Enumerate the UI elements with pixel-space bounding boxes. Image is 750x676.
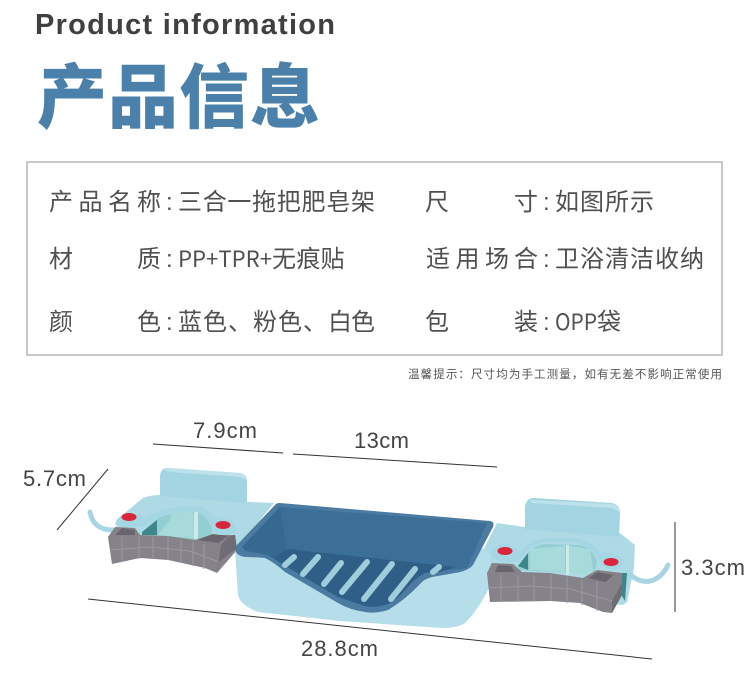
spec: applicable occasions: 适用场合	[426, 246, 538, 273]
dimension: 3.3cm	[675, 522, 745, 612]
spec: applicable occasions: 卫浴清洁收纳	[555, 246, 704, 273]
panel: product specification table	[27, 162, 722, 355]
left clamp unit	[90, 468, 274, 573]
tray drain ribs	[285, 557, 439, 599]
dimension: 3.3cm: 3.3cm	[681, 555, 745, 580]
spec: size: 如图所示	[555, 189, 654, 216]
product illustration: soap and mop holder	[90, 468, 668, 628]
dimension: 28.8cm: 28.8cm	[301, 636, 378, 661]
dimension: 7.9cm: 7.9cm	[193, 418, 257, 443]
dimension: 7.9cm	[153, 418, 283, 453]
spec: packaging: 装	[514, 309, 538, 336]
red buttons	[122, 513, 136, 521]
spec: colour	[49, 309, 375, 336]
spec: colour: 蓝色、粉色、白色	[178, 309, 375, 336]
gray clamp jaw	[108, 527, 237, 573]
right clamp unit	[487, 498, 668, 613]
spec: size: :	[543, 189, 550, 216]
spec: size	[425, 189, 654, 216]
soap tray	[235, 503, 494, 628]
spec: applicable occasions: :	[543, 246, 550, 273]
dimension: 5.7cm	[23, 466, 108, 530]
spec: material: :	[166, 246, 173, 273]
spec: packaging: 袋	[597, 309, 621, 336]
spec: material: 无痕贴	[272, 246, 344, 273]
dimension: 28.8cm	[88, 599, 652, 661]
spec: applicable occasions	[426, 246, 704, 273]
spec: size: 尺	[425, 189, 449, 216]
dimension: 13cm	[293, 428, 497, 467]
spec: product name	[49, 189, 375, 216]
dimension: 5.7cm: 5.7cm	[23, 466, 86, 491]
spec: packaging	[425, 305, 621, 337]
spec: packaging: OPP	[555, 305, 597, 337]
spec: colour: :	[166, 309, 173, 336]
red buttons	[498, 547, 512, 555]
spec: packaging: :	[543, 309, 550, 336]
spec: material: 质	[137, 246, 161, 273]
note: measurement disclaimer: 温馨提示：尺寸均为手工测量，如有无差不影响正常使用	[408, 367, 722, 381]
spec: material: PP+TPR+	[178, 242, 272, 274]
title: english heading: Product information	[35, 9, 335, 41]
spec: material: 材	[49, 246, 73, 273]
title: chinese heading: 产品信息	[37, 59, 320, 137]
right clamp base connector	[478, 523, 635, 605]
spec: material	[49, 242, 344, 274]
spec: size: 寸	[514, 189, 538, 216]
spec: product name: 产品名称	[49, 189, 161, 216]
spec: colour: 色	[137, 309, 161, 336]
dimension: 13cm: 13cm	[354, 428, 409, 453]
spec: product name: 三合一拖把肥皂架	[178, 189, 375, 216]
spec: packaging: 包	[425, 309, 449, 336]
spec: product name: :	[166, 189, 173, 216]
gray clamp jaw	[487, 563, 622, 613]
spec: colour: 颜	[49, 309, 73, 336]
